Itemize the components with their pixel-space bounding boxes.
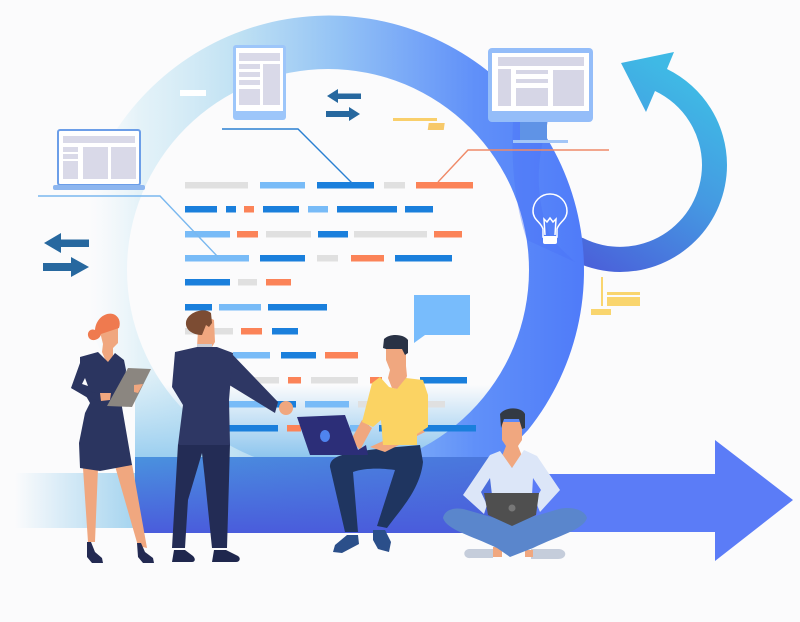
tablet — [107, 368, 151, 407]
jacket — [172, 347, 233, 445]
shoes — [333, 530, 391, 553]
neck and face — [386, 345, 407, 390]
hair — [88, 314, 120, 340]
person: man in suit — [172, 310, 293, 562]
laptop — [484, 493, 539, 526]
legs — [83, 464, 147, 548]
yellow notes, top — [393, 118, 445, 130]
arm and hand — [279, 401, 293, 415]
laptop logo — [508, 504, 516, 512]
base band — [135, 457, 520, 533]
shirt — [362, 377, 428, 445]
shoes — [172, 550, 240, 562]
laptop — [297, 415, 368, 455]
person: man with yellow shirt — [297, 335, 428, 553]
forward arrow — [500, 440, 793, 561]
forearm — [71, 388, 102, 401]
exchange arrows, top — [326, 89, 361, 121]
exchange arrows, left — [43, 233, 89, 277]
legs — [443, 508, 587, 557]
icon: tablet — [233, 45, 286, 120]
hair — [186, 310, 212, 335]
hair — [500, 408, 525, 429]
curved return arrow — [575, 52, 727, 272]
icon: light bulb — [533, 194, 567, 244]
dress — [71, 352, 132, 471]
person: man sitting cross-legged — [443, 408, 587, 559]
feet — [464, 549, 565, 559]
trousers — [172, 444, 230, 548]
hair — [383, 335, 408, 355]
person: woman with tablet — [71, 314, 154, 563]
neck and face — [100, 328, 118, 364]
laptop logo — [320, 430, 330, 442]
connector lines — [38, 129, 609, 257]
neck and face — [502, 422, 522, 468]
small white dash — [180, 90, 206, 96]
forearm — [351, 420, 425, 452]
hands — [100, 384, 143, 401]
shoes — [87, 542, 154, 563]
collar — [197, 344, 212, 348]
circular process ring — [74, 16, 584, 470]
white gap — [82, 378, 88, 386]
code lines — [185, 182, 476, 432]
ankles — [493, 547, 533, 557]
inner white circle — [127, 69, 529, 471]
trousers — [330, 445, 423, 532]
icon: desktop monitor — [488, 48, 593, 143]
yellow notes, right — [591, 277, 640, 315]
left fade strip — [15, 473, 135, 528]
ring shadow under monitor — [513, 122, 575, 262]
icon: laptop — [53, 130, 145, 190]
head — [197, 316, 215, 347]
left fade behind inner circle — [135, 370, 205, 457]
speech bubble — [414, 295, 470, 343]
shirt — [463, 450, 560, 514]
